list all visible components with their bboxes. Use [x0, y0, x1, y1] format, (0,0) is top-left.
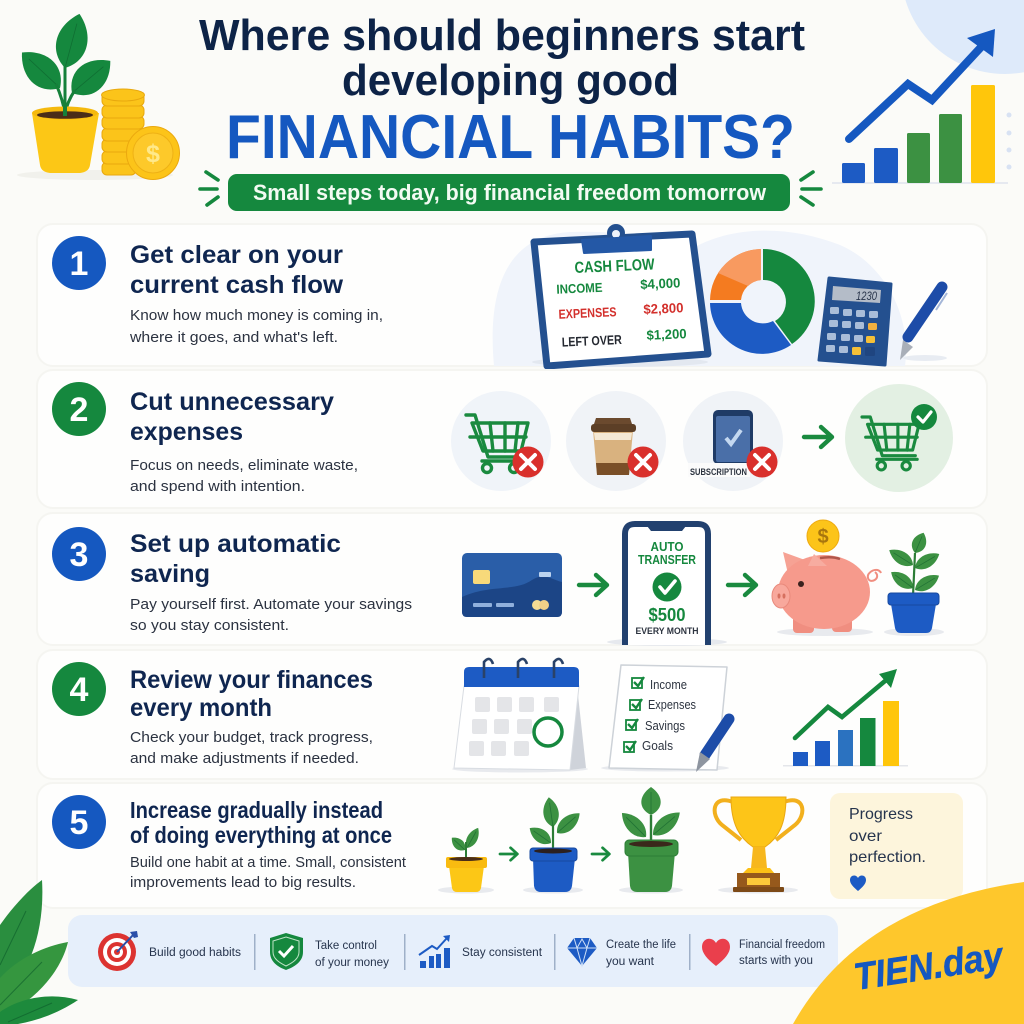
icon: potted plant: [884, 530, 944, 636]
icon: shopping cart crossed: [451, 391, 551, 491]
icon: trophy: [715, 797, 802, 894]
yellow corner: [793, 882, 1024, 1024]
panel: step 1: [37, 224, 987, 367]
icon: phone auto transfer: $500: [648, 605, 686, 625]
icon: phone auto transfer: EVERY MONTH: [636, 626, 699, 637]
icon: checklist: [601, 665, 729, 772]
step 4 heading: Review your finances: [130, 666, 373, 694]
step 3 body: so you stay consistent.: [130, 617, 289, 634]
icon: plant large: [617, 787, 685, 894]
donut chart: [710, 249, 815, 354]
step 5 body: improvements lead to big results.: [130, 874, 356, 891]
step 2 number: 2: [70, 391, 88, 429]
step 5 body: [130, 854, 407, 891]
arrow: [579, 575, 607, 595]
pen: [900, 287, 947, 361]
illustration: plant and coins: $: [146, 140, 160, 168]
label: build good habits: Build good habits: [149, 947, 241, 959]
illustration: plant and coins: [12, 10, 179, 180]
step 4 number: [52, 662, 106, 716]
icon: seedling small: [438, 825, 494, 894]
step 2 heading: Cut unnecessary: [130, 388, 334, 416]
label: financial freedom: Financial freedom: [739, 939, 825, 951]
label: take control: of your money: [315, 957, 389, 969]
step 5 number: 5: [70, 804, 88, 842]
label: create the life: you want: [606, 956, 655, 968]
step 4 heading: [130, 666, 373, 722]
step 3 body: [130, 596, 412, 634]
subtitle pill: [200, 172, 821, 211]
icon: checklist: Income: [650, 678, 687, 692]
step 3 body: Pay yourself first. Automate your savings: [130, 596, 412, 613]
step 1 heading: current cash flow: [130, 271, 344, 299]
callout: progress over perfection: over: [849, 828, 883, 845]
step 1 body: where it goes, and what's left.: [129, 329, 338, 346]
step 1 body: Know how much money is coming in,: [130, 307, 383, 324]
decorative corner circle: [901, 0, 1024, 74]
arrow: [500, 848, 517, 860]
illustration background blob: [493, 231, 906, 366]
title: developing good: [342, 56, 679, 105]
illustration: rising bar chart: [832, 29, 1012, 184]
icon: checklist: Savings: [645, 719, 685, 733]
icon: target: [98, 931, 138, 971]
clipboard: cash flow: INCOME: [556, 280, 603, 297]
icon: piggy bank: $: [817, 526, 829, 548]
calculator: [819, 278, 891, 365]
panel: step 5: [37, 783, 987, 908]
label: take control: [315, 940, 389, 969]
icon: shield: [270, 933, 303, 970]
clipboard: cash flow: [532, 224, 708, 367]
icon: checklist: Goals: [642, 739, 673, 753]
step 1 number: [52, 236, 106, 290]
step 1 body: [129, 307, 383, 346]
clipboard: cash flow: $2,800: [643, 300, 684, 317]
step 3 heading: [130, 530, 341, 588]
icon: growth chart: [419, 935, 450, 968]
icon: subscription crossed: SUBSCRIPTION: [690, 467, 747, 478]
step 1 number: 1: [70, 245, 88, 283]
clipboard: cash flow: $1,200: [646, 326, 687, 343]
step 2 body: and spend with intention.: [130, 478, 305, 495]
icon: diamond: [567, 938, 597, 966]
callout: progress over perfection: perfection.: [849, 849, 926, 866]
arrow: [728, 575, 756, 595]
label: financial freedom: [739, 939, 825, 967]
step 4 number: 4: [70, 671, 89, 709]
step 2 heading: [130, 388, 334, 446]
step 3 number: 3: [70, 536, 88, 574]
step 2 body: [130, 457, 358, 495]
step 2 body: Focus on needs, eliminate waste,: [130, 457, 358, 474]
icon: phone auto transfer: TRANSFER: [638, 553, 696, 567]
icon: phone auto transfer: [607, 524, 727, 646]
brand wordmark: TIEN.day: [851, 935, 1007, 999]
decorative leaves bottom left: [0, 880, 78, 1024]
clipboard: cash flow: CASH FLOW: [574, 256, 656, 277]
label: take control: Take control: [315, 940, 377, 952]
icon: piggy bank: [772, 520, 881, 636]
subtitle pill: Small steps today, big financial freedom tomorrow: [253, 180, 767, 205]
step 5 heading: Increase gradually instead: [130, 797, 383, 823]
chart: monthly growth: [783, 669, 908, 766]
callout: progress over perfection: [830, 793, 963, 899]
step 2 heading: expenses: [130, 418, 243, 446]
arrow: [804, 427, 832, 447]
pen: [696, 719, 729, 772]
step 5 heading: [130, 797, 392, 848]
arrow: [592, 848, 609, 860]
step 5 number: [52, 795, 106, 849]
callout: progress over perfection: Progress: [849, 806, 913, 823]
step 3 heading: Set up automatic: [130, 530, 341, 558]
title: FINANCIAL HABITS?: [226, 103, 795, 172]
label: create the life: [606, 939, 676, 968]
clipboard: cash flow: LEFT OVER: [561, 332, 623, 350]
step 5 heading: of doing everything at once: [130, 822, 392, 848]
step 2 number: [52, 382, 106, 436]
title: [199, 11, 805, 172]
step 4 heading: every month: [130, 694, 272, 722]
title: Where should beginners start: [199, 11, 805, 60]
step 1 heading: [130, 241, 344, 299]
calculator: 1230: [856, 291, 877, 303]
clipboard: cash flow: $4,000: [640, 275, 681, 292]
panel: step 2: [37, 370, 987, 508]
panel: step 3: [37, 513, 987, 646]
step 3 number: [52, 527, 106, 581]
step 5 body: Build one habit at a time. Small, consistent: [130, 854, 407, 871]
icon: coffee crossed: [566, 391, 666, 491]
label: stay consistent: Stay consistent: [462, 947, 543, 959]
icon: plant medium: [523, 796, 584, 894]
step 3 heading: saving: [130, 560, 210, 588]
clipboard: cash flow: EXPENSES: [558, 304, 617, 322]
icon: calendar: [452, 659, 588, 772]
label: create the life: Create the life: [606, 939, 676, 951]
icon: phone auto transfer: AUTO: [650, 540, 684, 554]
panel: step 4: [37, 650, 987, 779]
icon: checklist: Expenses: [648, 698, 696, 712]
benefits band: [68, 915, 838, 987]
icon: subscription crossed: [683, 391, 783, 491]
icon: bank card: [462, 553, 562, 617]
icon: shopping cart approved: [845, 384, 953, 492]
label: financial freedom: starts with you: [739, 955, 813, 967]
step 4 body: and make adjustments if needed.: [130, 750, 359, 767]
icon: heart: [702, 939, 730, 966]
step 4 body: Check your budget, track progress,: [130, 729, 373, 746]
step 1 heading: Get clear on your: [130, 241, 343, 269]
step 4 body: [130, 729, 373, 767]
